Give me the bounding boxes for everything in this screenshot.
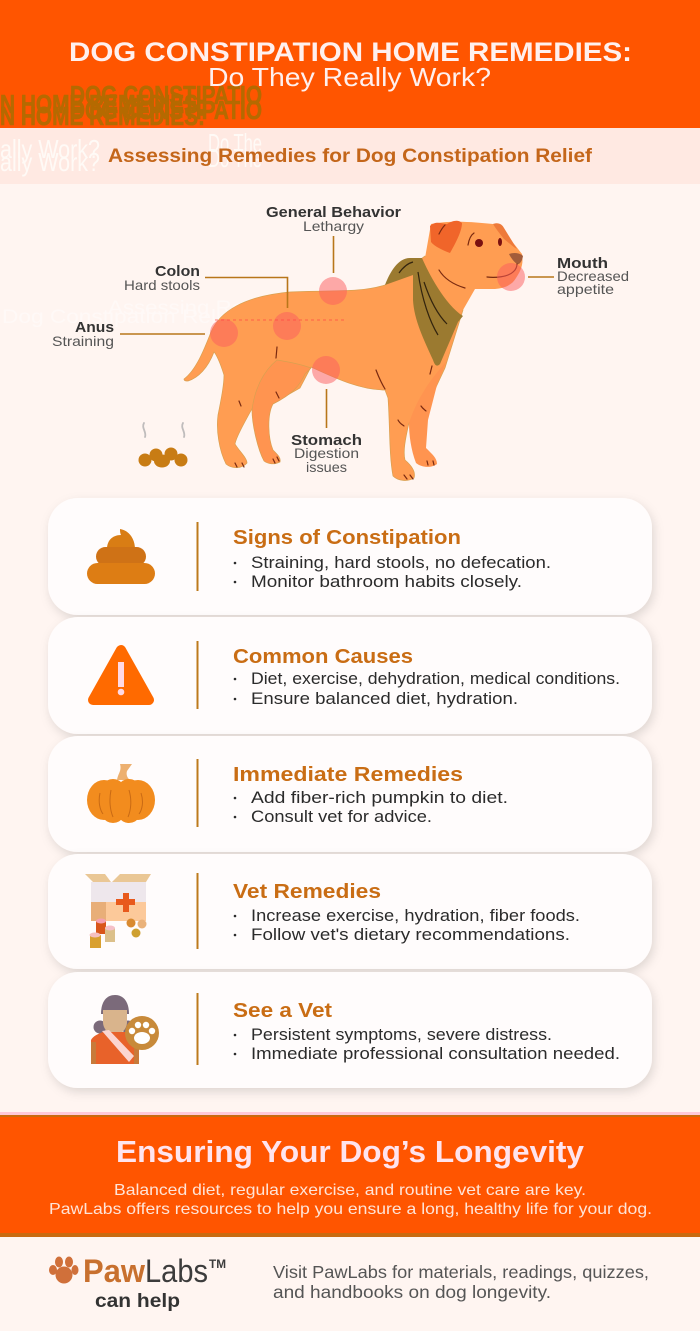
card: immediate remedies xyxy=(48,736,652,852)
card heading: Common Causes xyxy=(233,645,413,668)
bandana folds xyxy=(399,262,447,335)
PawLabs logo: Labs xyxy=(145,1253,208,1289)
card: vet remedies xyxy=(48,854,652,969)
label: general behavior: General Behavior xyxy=(266,204,401,221)
ghost band artefacts: ally Work? xyxy=(0,147,100,177)
card bullets xyxy=(234,907,580,944)
ghost band artefacts: ally Work? xyxy=(0,134,100,164)
card heading: Vet Remedies xyxy=(233,880,381,903)
subtitle: Do They Really Work? xyxy=(208,62,491,92)
label: stomach: Digestion xyxy=(294,445,359,461)
section band xyxy=(0,128,700,184)
ghost band artefacts xyxy=(0,128,262,177)
PawLabs logo: can help xyxy=(95,1291,180,1312)
icon: poop pile with steam xyxy=(138,423,188,468)
card bullets: Straining, hard stools, no defecation. xyxy=(251,554,551,572)
card bullets: Diet, exercise, dehydration, medical conditions. xyxy=(251,670,620,688)
label: mouth xyxy=(528,255,629,297)
label: stomach: Stomach xyxy=(291,432,362,449)
label: general behavior: Lethargy xyxy=(303,218,364,234)
PawLabs logo: TM xyxy=(209,1257,226,1271)
label: mouth: appetite xyxy=(557,281,614,297)
ghost title artefacts: DOG CONSTIPATIO xyxy=(70,80,262,110)
ghost text in dog area: Dog Constipation Relief xyxy=(2,307,241,328)
far legs xyxy=(252,360,446,467)
icon: medicine box xyxy=(85,874,151,948)
call to action text: Visit PawLabs for materials, readings, quizzes, xyxy=(273,1262,649,1282)
ghost band artefacts: Do The xyxy=(208,128,262,158)
card: see a vet xyxy=(48,972,652,1088)
label: colon: Colon xyxy=(155,263,200,280)
label: mouth: Decreased xyxy=(557,268,629,284)
longevity banner xyxy=(0,1112,700,1237)
label: general behavior xyxy=(266,204,401,273)
card bullets: Follow vet's dietary recommendations. xyxy=(251,926,570,944)
banner heading: Ensuring Your Dog’s Longevity xyxy=(116,1134,585,1169)
card bullets: Consult vet for advice. xyxy=(251,808,432,826)
banner text: Balanced diet, regular exercise, and routine vet care are key. xyxy=(114,1182,586,1199)
card heading: Signs of Constipation xyxy=(233,526,461,549)
face details xyxy=(439,225,523,288)
ghost band artefacts: Do The xyxy=(208,143,262,173)
card bullets: Ensure balanced diet, hydration. xyxy=(251,690,518,708)
head xyxy=(425,222,523,310)
card bullets: Add fiber-rich pumpkin to diet. xyxy=(251,789,508,807)
body creases xyxy=(235,347,434,479)
card bullets xyxy=(234,1026,620,1063)
dog illustration xyxy=(184,221,525,480)
label: stomach xyxy=(291,389,362,475)
label: anus: Straining xyxy=(52,333,114,349)
ghost text in dog area xyxy=(2,298,349,328)
card bullets xyxy=(234,554,551,591)
call to action text xyxy=(273,1262,649,1302)
label: anus xyxy=(52,319,205,349)
PawLabs logo: Paw xyxy=(83,1253,145,1289)
icon: vet with paw badge xyxy=(91,995,159,1064)
label: colon xyxy=(124,263,288,308)
label: stomach: issues xyxy=(306,459,347,475)
ghost title artefacts: DOG CONSTIPATIO xyxy=(70,95,262,125)
card bullets xyxy=(234,670,620,708)
label: colon: Hard stools xyxy=(124,277,200,293)
card heading: Immediate Remedies xyxy=(233,763,463,786)
card bullets: Increase exercise, hydration, fiber foods. xyxy=(251,907,580,925)
icon: warning triangle xyxy=(93,650,149,700)
card bullets: Immediate professional consultation needed. xyxy=(251,1045,620,1063)
banner text xyxy=(49,1182,652,1218)
call to action text: and handbooks on dog longevity. xyxy=(273,1282,551,1302)
label: mouth: Mouth xyxy=(557,255,608,272)
ghost title artefacts xyxy=(0,80,262,131)
label: anus: Anus xyxy=(75,319,114,336)
icon: pumpkin xyxy=(87,764,155,823)
ears xyxy=(430,221,462,253)
ghost text in dog area: Assessing Remedies for xyxy=(108,298,349,319)
title: DOG CONSTIPATION HOME REMEDIES: xyxy=(69,37,632,67)
icon: paw xyxy=(49,1256,78,1284)
section heading: Assessing Remedies for Dog Constipation Relief xyxy=(108,145,593,167)
PawLabs logo xyxy=(49,1253,226,1312)
card bullets: Monitor bathroom habits closely. xyxy=(251,573,522,591)
card heading: See a Vet xyxy=(233,999,332,1022)
body xyxy=(184,256,463,480)
ghost title artefacts: N HOME REMEDIES: xyxy=(0,89,205,119)
card: common causes xyxy=(48,617,652,734)
card: signs of constipation xyxy=(48,498,652,615)
header banner xyxy=(0,0,700,131)
ghost title artefacts: N HOME REMEDIES: xyxy=(0,101,205,131)
symptom markers xyxy=(210,263,525,384)
bandana xyxy=(385,258,463,366)
card bullets: Persistent symptoms, severe distress. xyxy=(251,1026,552,1044)
banner text: PawLabs offers resources to help you ensure a long, healthy life for your dog. xyxy=(49,1201,652,1218)
card bullets xyxy=(234,789,508,826)
icon: poop xyxy=(87,529,155,584)
